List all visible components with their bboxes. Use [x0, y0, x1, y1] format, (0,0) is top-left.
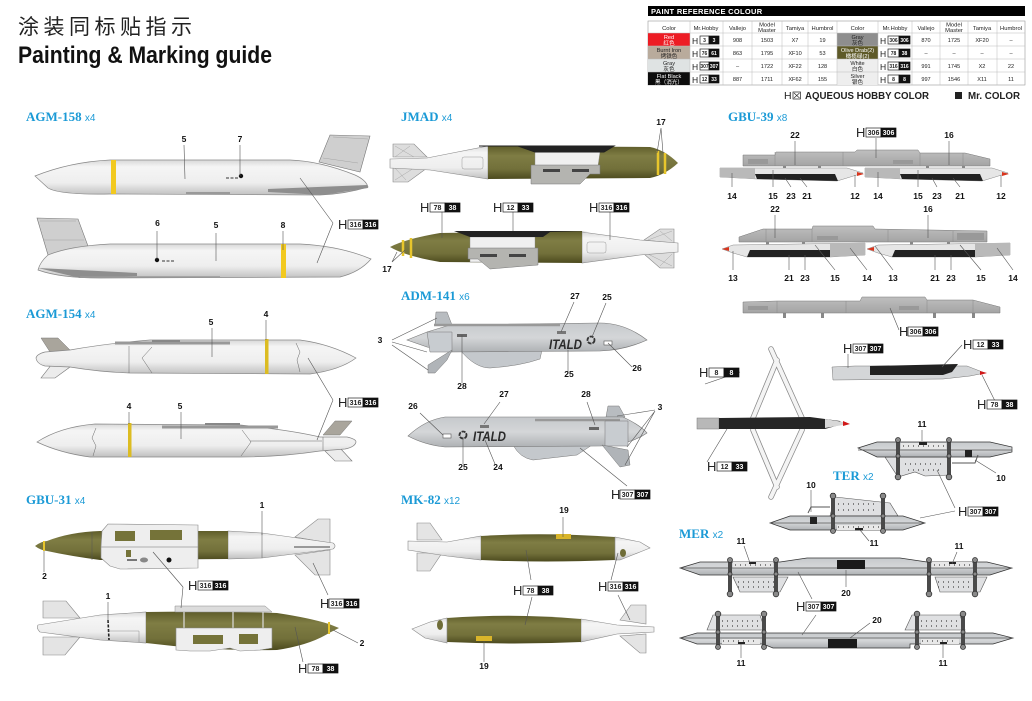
heading: ADM-141: ADM-141 x6	[401, 288, 470, 303]
callouts: 11	[954, 541, 964, 551]
paint reference table: Humbrol	[1000, 26, 1022, 32]
paint tag	[513, 583, 553, 598]
paint reference table: 306	[900, 38, 909, 44]
callouts: 21	[930, 273, 940, 283]
paint tag: 316	[350, 400, 361, 407]
paint reference table: XF22	[788, 64, 802, 70]
paint tag: 33	[992, 342, 999, 349]
paint reference table: XF62	[788, 77, 802, 83]
callouts: 16	[923, 204, 933, 214]
panel: GBU-31	[26, 492, 365, 676]
carrier rack upper	[743, 150, 990, 169]
paint reference table: 33	[711, 77, 717, 83]
callouts: 15	[830, 273, 840, 283]
callouts: 1	[260, 500, 265, 510]
paint reference table: 22	[1008, 64, 1014, 70]
paint reference table: 橄榄绿(2)	[846, 52, 869, 60]
callouts: 11	[870, 538, 879, 548]
callouts	[382, 117, 666, 274]
paint tag: 307	[808, 604, 819, 611]
carrier rack single	[743, 297, 1000, 318]
paint tag: 307	[823, 604, 834, 611]
panel: JMAD	[382, 109, 678, 274]
callouts	[378, 291, 663, 486]
paint tag: H	[188, 578, 197, 593]
paint tag	[338, 217, 378, 232]
paint tag: 38	[327, 666, 334, 673]
paint reference table: Master	[945, 28, 963, 34]
title	[18, 16, 272, 69]
paint reference table: X2	[979, 64, 985, 70]
callouts: 1	[106, 591, 111, 601]
paint tag	[963, 337, 1003, 352]
missile: AGM-158 lower	[37, 218, 371, 278]
callouts: 15	[768, 191, 778, 201]
callouts: 13	[888, 273, 898, 283]
paint tag: H	[513, 583, 522, 598]
paint tag: 8	[715, 370, 719, 377]
paint tag: 306	[910, 329, 921, 336]
callouts: 21	[802, 191, 812, 201]
carrier rack lower	[739, 226, 987, 245]
paint tag	[699, 365, 739, 380]
decals and callouts: 5	[182, 134, 187, 144]
paint reference table: 870	[921, 38, 931, 44]
heading: JMAD: JMAD x4	[401, 109, 453, 124]
paint reference table: Model	[946, 22, 962, 28]
paint reference table: 76	[702, 51, 707, 57]
heading: AGM-154: AGM-154 x4	[26, 306, 96, 321]
paint reference table: 19	[819, 38, 826, 44]
callouts: 11	[736, 536, 746, 546]
paint reference table: 8	[903, 77, 906, 83]
paint tag	[493, 200, 533, 215]
bomb with deployed wings	[697, 349, 850, 497]
callouts: 27	[499, 389, 509, 399]
paint tag	[707, 459, 747, 474]
callouts: 22	[770, 204, 780, 214]
paint legend: H	[784, 90, 792, 102]
callouts: 5	[178, 401, 183, 411]
paint reference table: –	[1009, 51, 1013, 57]
paint tag	[589, 200, 629, 215]
paint tag: H	[843, 341, 852, 356]
callouts: 14	[862, 273, 872, 283]
paint reference table: 1722	[761, 64, 773, 70]
paint reference table: 316	[900, 64, 909, 70]
callouts: 25	[458, 462, 468, 472]
callouts: 21	[955, 191, 965, 201]
paint tag: 306	[925, 329, 936, 336]
paint tag	[843, 341, 883, 356]
decals and callouts: 5	[214, 220, 219, 230]
paint reference table: 53	[819, 51, 826, 57]
paint reference table: Humbrol	[812, 26, 833, 32]
heading: GBU-39: GBU-39 x8	[728, 109, 788, 124]
paint tag: H	[338, 395, 347, 410]
paint tag: 316	[616, 205, 627, 212]
paint legend: Mr. COLOR	[968, 90, 1020, 102]
callouts: 23	[946, 273, 956, 283]
paint tag: 316	[346, 601, 357, 608]
paint reference table: H	[880, 75, 886, 85]
paint reference table: 863	[733, 51, 742, 57]
rack: MER upper	[680, 558, 1012, 597]
bombs upper pair	[720, 168, 1009, 181]
panel: AGM-154	[26, 306, 378, 461]
callouts: 23	[932, 191, 942, 201]
paint reference table: 8	[892, 77, 895, 83]
bomb: JMAD upper	[390, 144, 678, 184]
callouts	[479, 505, 630, 671]
decals and callouts: 7	[238, 134, 243, 144]
paint tag: 307	[855, 346, 866, 353]
bomb: GBU-31 upper	[35, 519, 335, 575]
paint reference table: –	[1009, 38, 1013, 44]
paint tag: 316	[610, 584, 621, 591]
paint tag: H	[977, 397, 986, 412]
paint tag: 12	[507, 205, 514, 212]
paint reference table: 991	[921, 64, 931, 70]
paint reference table: H	[880, 49, 886, 59]
paint tag: H	[611, 487, 620, 502]
paint reference table: Mr.Hobby	[883, 26, 908, 32]
paint tag: H	[963, 337, 972, 352]
callouts: 12	[850, 191, 860, 201]
paint tag	[796, 599, 836, 614]
paint reference table: 155	[818, 77, 827, 83]
paint tag	[977, 397, 1017, 412]
paint legend: AQUEOUS HOBBY COLOR	[805, 90, 929, 102]
paint tag: 12	[721, 464, 728, 471]
callouts: 3	[378, 335, 383, 345]
paint reference table: Vallejo	[729, 26, 746, 32]
paint tag: H	[589, 200, 598, 215]
paint tag: 307	[622, 492, 633, 499]
paint reference table: 306	[889, 38, 898, 44]
heading: MER: MER x2	[679, 526, 724, 541]
paint tag	[958, 504, 998, 519]
paint reference table: Color	[662, 26, 676, 32]
paint reference table: X11	[977, 77, 987, 83]
paint reference table: 灰色	[663, 65, 675, 73]
paint reference table: Tamiya	[786, 26, 805, 32]
paint tag: 38	[1006, 402, 1013, 409]
callouts: 10	[806, 480, 816, 490]
callouts: 15	[976, 273, 986, 283]
paint reference table: Red	[664, 35, 674, 41]
paint reference table: 316	[889, 64, 898, 70]
paint reference table: 1546	[948, 77, 960, 83]
bomb: GBU-31 lower	[37, 601, 339, 655]
bomb: JMAD lower	[390, 229, 678, 269]
paint reference table: 1795	[761, 51, 773, 57]
paint tag	[188, 578, 228, 593]
paint reference table: H	[692, 49, 698, 59]
paint reference table: X7	[792, 38, 798, 44]
paint reference table: Vallejo	[918, 26, 934, 32]
paint tag: H	[958, 504, 967, 519]
paint legend	[784, 90, 1020, 102]
paint tag	[856, 125, 896, 140]
paint tag	[298, 661, 338, 676]
paint tag: 316	[601, 205, 612, 212]
paint reference table: PAINT REFERENCE COLOUR	[651, 7, 763, 16]
paint tag: 78	[312, 666, 319, 673]
decals and callouts: 8	[281, 220, 286, 230]
marking: ITALD: ITALD	[549, 336, 582, 352]
paint reference table: 红色	[663, 39, 675, 47]
paint tag: 316	[331, 601, 342, 608]
paint reference table: Model	[759, 22, 775, 28]
callouts: 15	[913, 191, 923, 201]
marking: ITALD: ITALD	[473, 428, 506, 444]
callouts: 24	[493, 462, 503, 472]
paint tag: 316	[350, 222, 361, 229]
paint reference table: 307	[710, 64, 718, 70]
paint reference table: H	[880, 62, 886, 72]
paint reference table: 997	[921, 77, 931, 83]
paint tag: 316	[215, 583, 226, 590]
panel: GBU-39	[697, 109, 1018, 497]
bomb: MK-82 lower	[412, 605, 654, 653]
paint reference table: 1711	[761, 77, 773, 83]
callouts: 14	[1008, 273, 1018, 283]
paint reference table: Mr.Hobby	[694, 26, 719, 32]
callouts: 20	[841, 588, 851, 598]
panel: MK-82	[401, 492, 654, 671]
paint reference table: 11	[1008, 77, 1014, 83]
paint reference table: 灰色	[852, 39, 863, 47]
paint reference table: H	[692, 75, 698, 85]
callouts: 28	[581, 389, 591, 399]
panel: ADM-141	[378, 288, 663, 502]
missile: AGM-154 lower	[37, 421, 356, 461]
heading: TER: TER x2	[833, 468, 874, 483]
paint reference table: 白色	[852, 65, 863, 73]
callouts: 3	[658, 402, 663, 412]
paint tag	[611, 487, 650, 502]
paint tag: H	[707, 459, 716, 474]
paint reference table: 307	[700, 64, 709, 70]
paint tag: 12	[977, 342, 984, 349]
paint tag: 316	[200, 583, 211, 590]
paint reference table: Flat Black	[657, 74, 681, 80]
paint tag: H	[298, 661, 307, 676]
paint reference table: 黑（消光）	[655, 78, 683, 86]
callouts: 14	[727, 191, 737, 201]
paint tag: 316	[365, 222, 376, 229]
paint tag: 78	[434, 205, 441, 212]
paint tag: 38	[542, 588, 549, 595]
heading: AGM-158: AGM-158 x4	[26, 109, 96, 124]
paint tag	[420, 200, 460, 215]
paint reference table: 银色	[852, 78, 863, 86]
paint tag: H	[420, 200, 429, 215]
paint tag: 307	[970, 509, 981, 516]
title: Painting & Marking guide	[18, 42, 272, 69]
paint tag: 8	[730, 370, 734, 377]
decals and callouts: 6	[155, 218, 160, 228]
paint tag	[598, 579, 638, 594]
paint reference table: Burnt Iron	[657, 48, 681, 54]
rack: TER lower	[770, 493, 925, 534]
panel: MER	[679, 526, 1013, 668]
callouts: 27	[570, 291, 580, 301]
callouts	[806, 419, 1006, 548]
paint reference table: 烤铁色	[661, 52, 678, 60]
paint reference table: –	[736, 64, 740, 70]
paint reference table: 3	[713, 38, 716, 44]
paint reference table: XF10	[788, 51, 802, 57]
callouts: 12	[996, 191, 1006, 201]
callouts: 26	[408, 401, 418, 411]
paint tag: H	[320, 596, 329, 611]
callouts: 22	[790, 130, 800, 140]
paint reference table: 1725	[948, 38, 960, 44]
paint tag: H	[796, 599, 805, 614]
callouts: 5	[209, 317, 214, 327]
paint tag: 38	[449, 205, 456, 212]
paint tag	[320, 596, 359, 611]
rack: TER upper	[858, 438, 1012, 480]
callouts: 11	[736, 658, 746, 668]
callouts: 11	[918, 419, 927, 429]
paint tag: 316	[365, 400, 376, 407]
callouts: 4	[264, 309, 269, 319]
paint reference table: 12	[702, 77, 707, 83]
callouts: 13	[728, 273, 738, 283]
paint tag: H	[699, 365, 708, 380]
paint tag: 307	[637, 492, 648, 499]
missile: AGM-154 upper	[36, 338, 356, 378]
paint reference table: 1745	[948, 64, 960, 70]
missile: AGM-158 upper	[35, 135, 370, 195]
callouts: 16	[944, 130, 954, 140]
paint reference table: H	[692, 62, 698, 72]
callouts: 20	[872, 615, 882, 625]
paint tag: 316	[625, 584, 636, 591]
paint reference table: Gray	[851, 35, 864, 41]
paint tag: H	[493, 200, 502, 215]
paint reference table: 38	[902, 51, 907, 57]
paint reference table: –	[980, 51, 984, 57]
bombs lower pair	[722, 243, 1010, 257]
heading: GBU-31: GBU-31 x4	[26, 492, 86, 507]
paint tag: 78	[991, 402, 998, 409]
callouts: 28	[457, 381, 467, 391]
paint reference table: 887	[733, 77, 742, 83]
paint tag: 33	[522, 205, 529, 212]
paint reference table: Gray	[663, 61, 675, 67]
callouts: 2	[42, 571, 47, 581]
paint reference table: 78	[891, 51, 896, 57]
callouts: 10	[996, 473, 1006, 483]
paint reference table: Olive Drab(2)	[841, 48, 874, 54]
decoy: ADM-141 lower	[408, 406, 647, 467]
paint reference table: Color	[851, 26, 864, 32]
paint tag: 306	[883, 130, 894, 137]
panel: AGM-158	[26, 109, 378, 278]
callouts: 26	[632, 363, 642, 373]
paint tag	[338, 395, 378, 410]
paint reference table: White	[850, 61, 865, 67]
paint reference table: 908	[733, 38, 742, 44]
callouts: 17	[656, 117, 666, 127]
paint reference table: Silver	[850, 74, 865, 80]
callouts	[127, 309, 333, 440]
paint tag: H	[598, 579, 607, 594]
callouts	[736, 536, 964, 668]
callouts: 17	[382, 264, 392, 274]
paint reference table: Master	[758, 28, 776, 34]
paint reference table	[648, 6, 1025, 86]
callouts: 25	[564, 369, 574, 379]
paint tag	[899, 324, 938, 339]
bomb side view	[832, 364, 987, 380]
bomb: MK-82 upper	[408, 523, 650, 571]
paint reference table: XF20	[975, 38, 989, 44]
callouts: 23	[800, 273, 810, 283]
paint reference table: –	[952, 51, 956, 57]
paint reference table: 61	[711, 51, 717, 57]
paint reference table: 128	[818, 64, 827, 70]
paint tag: H	[338, 217, 347, 232]
callouts: 19	[559, 505, 569, 515]
panel: TER	[770, 419, 1012, 548]
paint reference table: 1503	[761, 38, 773, 44]
paint reference table: Tamiya	[973, 26, 992, 32]
callouts: 14	[873, 191, 883, 201]
paint reference table: H	[692, 36, 698, 46]
callouts: 2	[360, 638, 365, 648]
paint reference table: H	[880, 36, 886, 46]
paint tag: 78	[527, 588, 534, 595]
callouts: 11	[938, 658, 948, 668]
paint tag: 306	[868, 130, 879, 137]
paint tag: H	[856, 125, 865, 140]
decoy: ADM-141 upper	[407, 312, 647, 373]
callouts	[42, 500, 365, 662]
paint tag: 307	[985, 509, 996, 516]
rack: MER lower	[680, 611, 1013, 650]
paint tag: 33	[736, 464, 743, 471]
callouts: 21	[784, 273, 794, 283]
paint reference table: 3	[703, 38, 706, 44]
callouts	[705, 130, 1018, 462]
callouts: 25	[602, 292, 612, 302]
callouts: 4	[127, 401, 132, 411]
paint reference table: –	[924, 51, 928, 57]
paint tag: H	[899, 324, 908, 339]
heading: MK-82: MK-82 x12	[401, 492, 461, 507]
paint tag: 307	[870, 346, 881, 353]
callouts: 19	[479, 661, 489, 671]
decals and callouts	[155, 134, 333, 263]
callouts: 23	[786, 191, 796, 201]
title: 涂装同标贴指示	[18, 16, 196, 39]
